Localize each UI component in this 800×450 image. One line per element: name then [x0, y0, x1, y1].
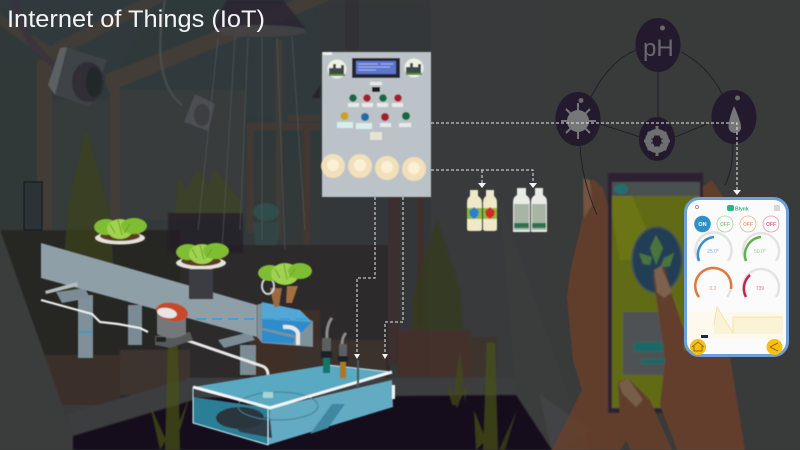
greenhouse floor: [73, 395, 552, 450]
pH sensor node: pH: [643, 35, 674, 62]
support legs: [56, 288, 256, 375]
pH gauge: 0.2: [710, 286, 717, 292]
sensor network diagram: [556, 18, 756, 215]
history chart: [687, 307, 783, 339]
app header: Blynk: [735, 206, 749, 212]
app header: [696, 205, 780, 212]
nutrient bottles A and B: [467, 190, 497, 231]
home button: [690, 339, 706, 355]
light sensor node: [556, 92, 600, 146]
control panel: [321, 52, 431, 197]
return pipe from pump: [41, 300, 148, 332]
pH and EC probes: [321, 318, 359, 388]
hands holding background phone: [552, 173, 745, 450]
temperature gauge: [696, 232, 731, 261]
on button: ON: [698, 222, 707, 228]
outlet pipe to tank: [186, 340, 268, 395]
nutrient water tank: [193, 365, 395, 445]
pH sensor node: [636, 18, 680, 72]
peristaltic pump 2: [348, 154, 372, 178]
peristaltic pump 3: [375, 156, 399, 180]
arrowheads: [354, 183, 741, 359]
humidity gauge: [743, 233, 779, 261]
lettuce plant 2: [176, 243, 229, 299]
mobile app screen: [686, 198, 788, 356]
off button red: [763, 216, 779, 232]
sprinkler camera heads: [15, 0, 215, 131]
logo badge left: [328, 60, 346, 78]
connecting ring lines: [580, 50, 733, 215]
water sensor node: [712, 90, 756, 144]
water pump: [155, 300, 193, 348]
connector: [370, 132, 382, 140]
pH gauge: [695, 268, 731, 297]
wall poster: [24, 182, 42, 230]
top row buttons: [348, 94, 403, 107]
temperature gauge: 25.0°: [707, 249, 719, 255]
peristaltic pump 4: [402, 157, 426, 181]
hanging lamp with water spray: [198, 0, 320, 250]
switch: [370, 82, 382, 92]
lettuce plant 1: [94, 218, 147, 244]
EC gauge: [743, 269, 779, 297]
humidity gauge: 50.0°: [754, 249, 766, 255]
off button green: [717, 216, 733, 232]
off button orange: OFF: [743, 222, 753, 228]
off button green: OFF: [720, 222, 730, 228]
lower row buttons: [337, 112, 411, 129]
on button: [694, 216, 711, 232]
dashed connection lines: [357, 123, 737, 355]
water flow dashes: [196, 318, 312, 320]
background plants and pots: [62, 128, 517, 450]
off button red: OFF: [766, 222, 776, 228]
net pot and water reservoir on channel: [257, 278, 313, 347]
nutrient bottles C and D: [513, 188, 547, 232]
title: Internet of Things (IoT): [7, 6, 265, 33]
logo badge right: [404, 58, 424, 78]
hydroponic channel: [41, 243, 257, 375]
off button orange: [740, 216, 756, 232]
EC gauge: 739: [756, 286, 764, 292]
share button: [766, 339, 782, 355]
gear control node: [639, 117, 675, 161]
lettuce plant 3: [258, 263, 312, 285]
LCD display: [352, 58, 400, 78]
peristaltic pump 1: [321, 154, 345, 178]
